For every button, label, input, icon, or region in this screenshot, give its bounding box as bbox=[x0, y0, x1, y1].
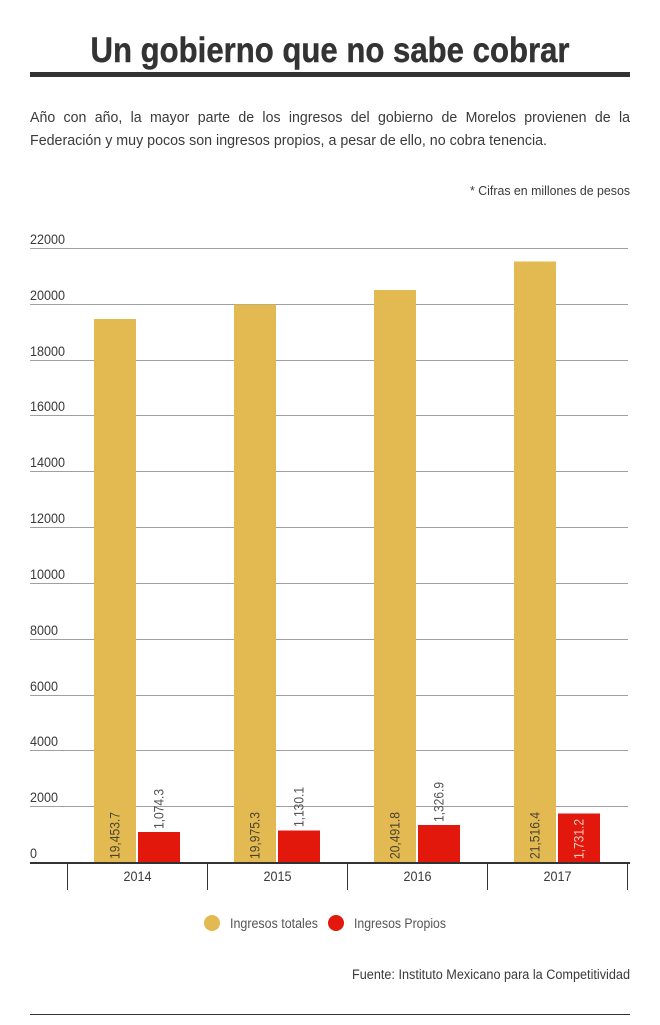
units note: * Cifras en millones de pesos bbox=[470, 183, 630, 198]
x axis labels bbox=[124, 869, 572, 884]
intro text: Federación y muy pocos son ingresos propios, a pesar de ello, no cobra tenencia. bbox=[30, 133, 547, 149]
bar chart bbox=[30, 232, 630, 890]
y axis labels: 8000 bbox=[30, 623, 58, 638]
bar value labels: 1,326.9 bbox=[432, 782, 446, 822]
bar value labels: 1,074.3 bbox=[152, 789, 166, 829]
bar value labels: 1,130.1 bbox=[292, 787, 306, 827]
y axis labels: 10000 bbox=[30, 567, 65, 582]
bar value labels: 19,453.7 bbox=[108, 812, 122, 859]
y axis labels: 12000 bbox=[30, 511, 65, 526]
bar value labels bbox=[108, 782, 586, 859]
y axis labels: 18000 bbox=[30, 344, 65, 359]
bar value labels: 20,491.8 bbox=[388, 812, 402, 859]
source: Fuente: Instituto Mexicano para la Competitividad bbox=[352, 967, 630, 982]
y axis labels: 4000 bbox=[30, 734, 58, 749]
legend bbox=[204, 915, 446, 931]
title underline bbox=[30, 72, 630, 77]
x axis labels: 2016 bbox=[404, 869, 432, 884]
y axis labels: 0 bbox=[30, 846, 37, 861]
title: Un gobierno que no sabe cobrar bbox=[90, 31, 570, 70]
y axis labels: 2000 bbox=[30, 790, 58, 805]
y axis labels: 6000 bbox=[30, 679, 58, 694]
y axis labels: 20000 bbox=[30, 288, 65, 303]
gridlines bbox=[30, 248, 628, 806]
legend: ingresos totales bbox=[204, 915, 318, 931]
legend: ingresos propios bbox=[328, 915, 446, 931]
x axis labels: 2015 bbox=[264, 869, 292, 884]
x axis baseline bbox=[30, 862, 630, 864]
legend: ingresos totales: Ingresos totales bbox=[230, 916, 318, 931]
x axis labels: 2017 bbox=[544, 869, 572, 884]
y axis labels: 14000 bbox=[30, 455, 65, 470]
bar value labels: 21,516.4 bbox=[528, 812, 542, 859]
y axis labels bbox=[30, 232, 65, 861]
bar value labels: 1,731.2 bbox=[572, 819, 586, 859]
intro text: Año con año, la mayor parte de los ingresos del gobierno de Morelos provienen de la bbox=[30, 110, 631, 126]
legend: ingresos propios: Ingresos Propios bbox=[354, 916, 446, 931]
bar value labels: 19,975.3 bbox=[248, 812, 262, 859]
bars: ingresos propios bbox=[138, 814, 600, 862]
x axis ticks bbox=[68, 864, 628, 890]
y axis labels: 22000 bbox=[30, 232, 65, 247]
bars: ingresos totales bbox=[94, 262, 556, 862]
x axis labels: 2014 bbox=[124, 869, 152, 884]
y axis labels: 16000 bbox=[30, 399, 65, 414]
bottom rule bbox=[30, 1014, 630, 1015]
intro text bbox=[30, 110, 631, 149]
